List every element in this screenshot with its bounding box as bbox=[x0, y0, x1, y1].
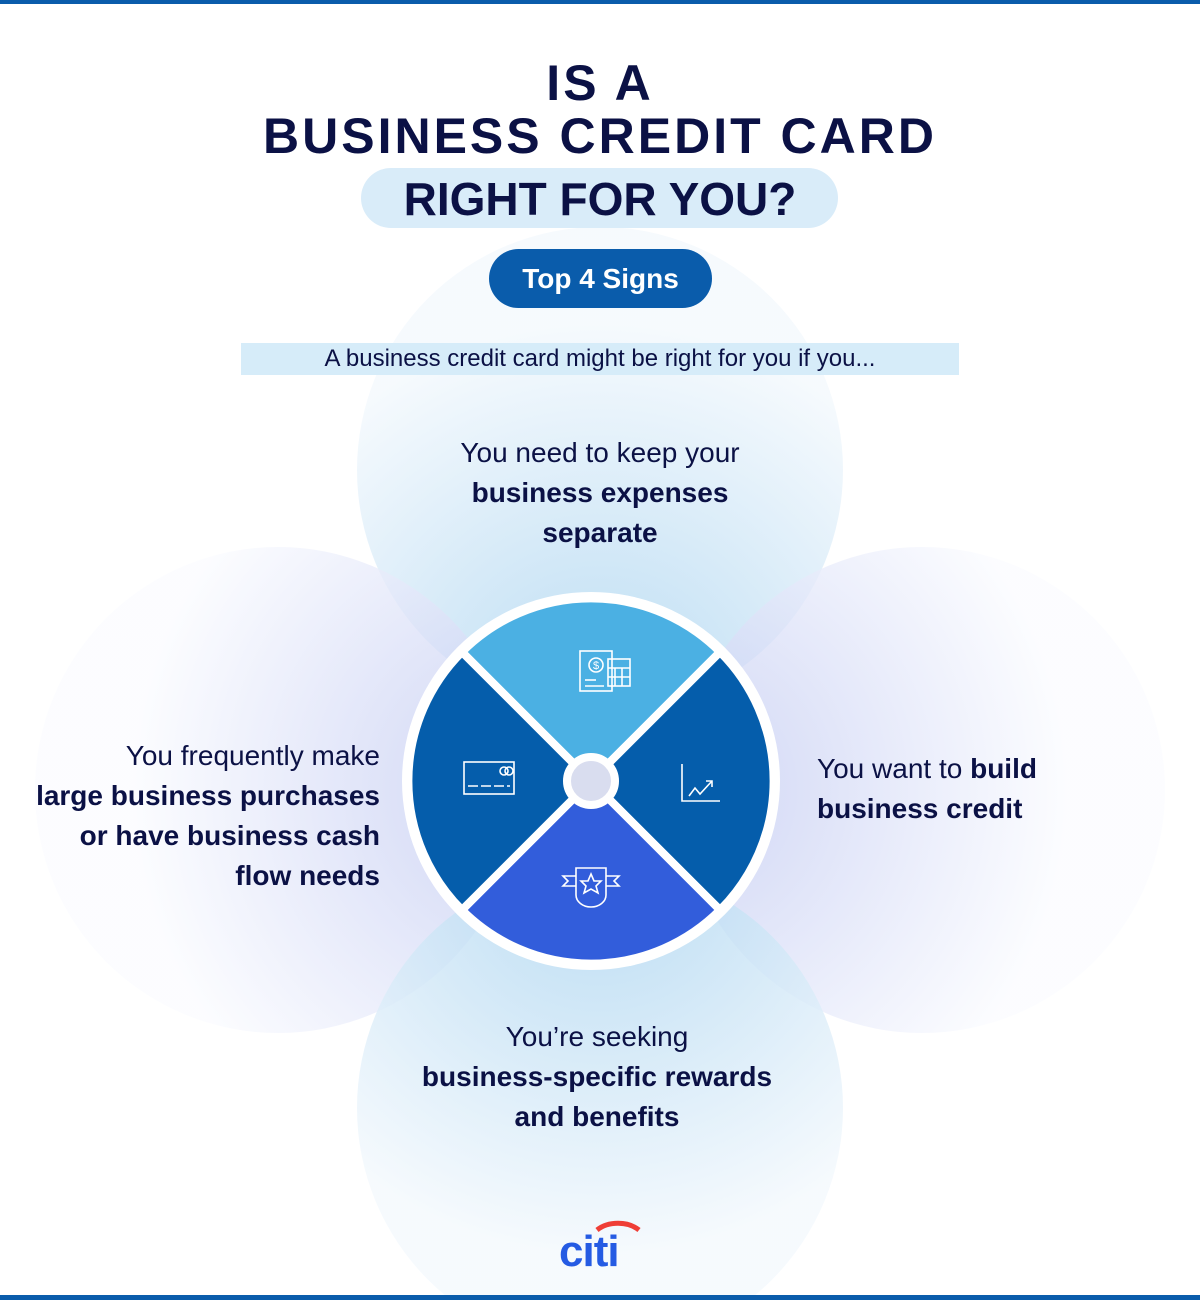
text: left sign: flow needs bbox=[235, 860, 380, 891]
title: IS A bbox=[546, 55, 654, 111]
text: top sign: separate bbox=[542, 517, 658, 548]
text: bottom sign: and benefits bbox=[515, 1101, 679, 1132]
text: bottom sign: You’re seeking bbox=[506, 1021, 688, 1052]
text: right sign bbox=[817, 753, 1037, 824]
intro banner: A business credit card might be right for you if you... bbox=[325, 345, 875, 372]
text: top sign: business expenses bbox=[472, 477, 728, 508]
icon: invoice calculator: $ bbox=[593, 660, 599, 672]
badge: Top 4 Signs bbox=[489, 249, 712, 308]
bottom border bbox=[0, 1295, 1200, 1300]
title highlight bbox=[361, 168, 838, 228]
icon: card bbox=[464, 762, 514, 794]
title: BUSINESS CREDIT CARD bbox=[263, 108, 937, 164]
segment right bbox=[591, 652, 774, 910]
text: top sign: You need to keep your bbox=[460, 437, 740, 468]
text: bottom sign: business-specific rewards bbox=[422, 1061, 772, 1092]
badge: Top 4 Signs: Top 4 Signs bbox=[522, 263, 679, 294]
text: bottom sign bbox=[422, 1021, 772, 1132]
icon: chart bbox=[682, 764, 720, 801]
intro banner bbox=[241, 343, 959, 375]
title: RIGHT FOR YOU? bbox=[404, 173, 796, 225]
text: right sign: business credit bbox=[817, 793, 1022, 824]
segment top bbox=[462, 598, 720, 781]
segment bottom bbox=[462, 781, 720, 964]
text: left sign bbox=[36, 740, 380, 891]
title bbox=[263, 55, 937, 228]
circle diagram bbox=[402, 592, 780, 970]
icon: badge bbox=[563, 868, 619, 907]
text: left sign: You frequently make bbox=[126, 740, 380, 771]
segment left bbox=[408, 652, 591, 910]
text: left sign: large business purchases bbox=[36, 780, 380, 811]
icon: invoice calculator bbox=[580, 651, 630, 691]
text: top sign bbox=[460, 437, 740, 548]
logo: citi bbox=[559, 1220, 640, 1270]
top border bbox=[0, 0, 1200, 4]
text: left sign: or have business cash bbox=[80, 820, 380, 851]
text: right sign: You want to build bbox=[817, 753, 1037, 784]
